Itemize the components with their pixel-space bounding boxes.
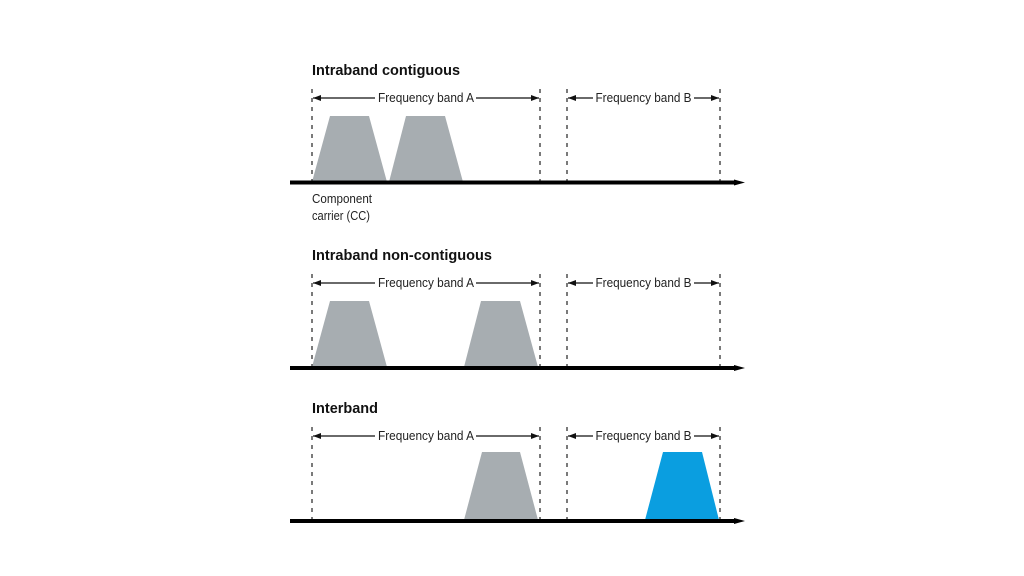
label: frequency band A: Frequency band A <box>378 91 475 105</box>
band boundaries <box>312 89 720 182</box>
component carrier 2 <box>464 301 538 367</box>
label: component carrier: carrier (CC) <box>312 209 370 223</box>
frequency axis <box>290 365 745 371</box>
panel: intraband contiguous <box>290 62 745 223</box>
heading: interband: Interband <box>312 400 378 417</box>
label: component carrier: Component <box>312 192 372 206</box>
component carrier 1 <box>312 116 387 182</box>
heading: intraband non-contiguous: Intraband non-contiguous <box>312 247 492 264</box>
panel: interband <box>290 400 745 524</box>
heading: intraband contiguous: Intraband contiguous <box>312 62 460 79</box>
band boundaries <box>312 274 720 367</box>
component carrier in band B (blue) <box>645 452 719 520</box>
component carrier in band A <box>464 452 538 520</box>
band boundaries <box>312 427 720 520</box>
frequency axis <box>290 518 745 524</box>
frequency axis <box>290 180 745 186</box>
label: frequency band A: Frequency band A <box>378 429 475 443</box>
label: frequency band B: Frequency band B <box>596 276 692 290</box>
component carrier 1 <box>312 301 387 367</box>
label: frequency band B: Frequency band B <box>596 429 692 443</box>
component carrier 2 <box>389 116 463 182</box>
label: frequency band A: Frequency band A <box>378 276 475 290</box>
panel: intraband non-contiguous <box>290 247 745 371</box>
label: frequency band B: Frequency band B <box>596 91 692 105</box>
